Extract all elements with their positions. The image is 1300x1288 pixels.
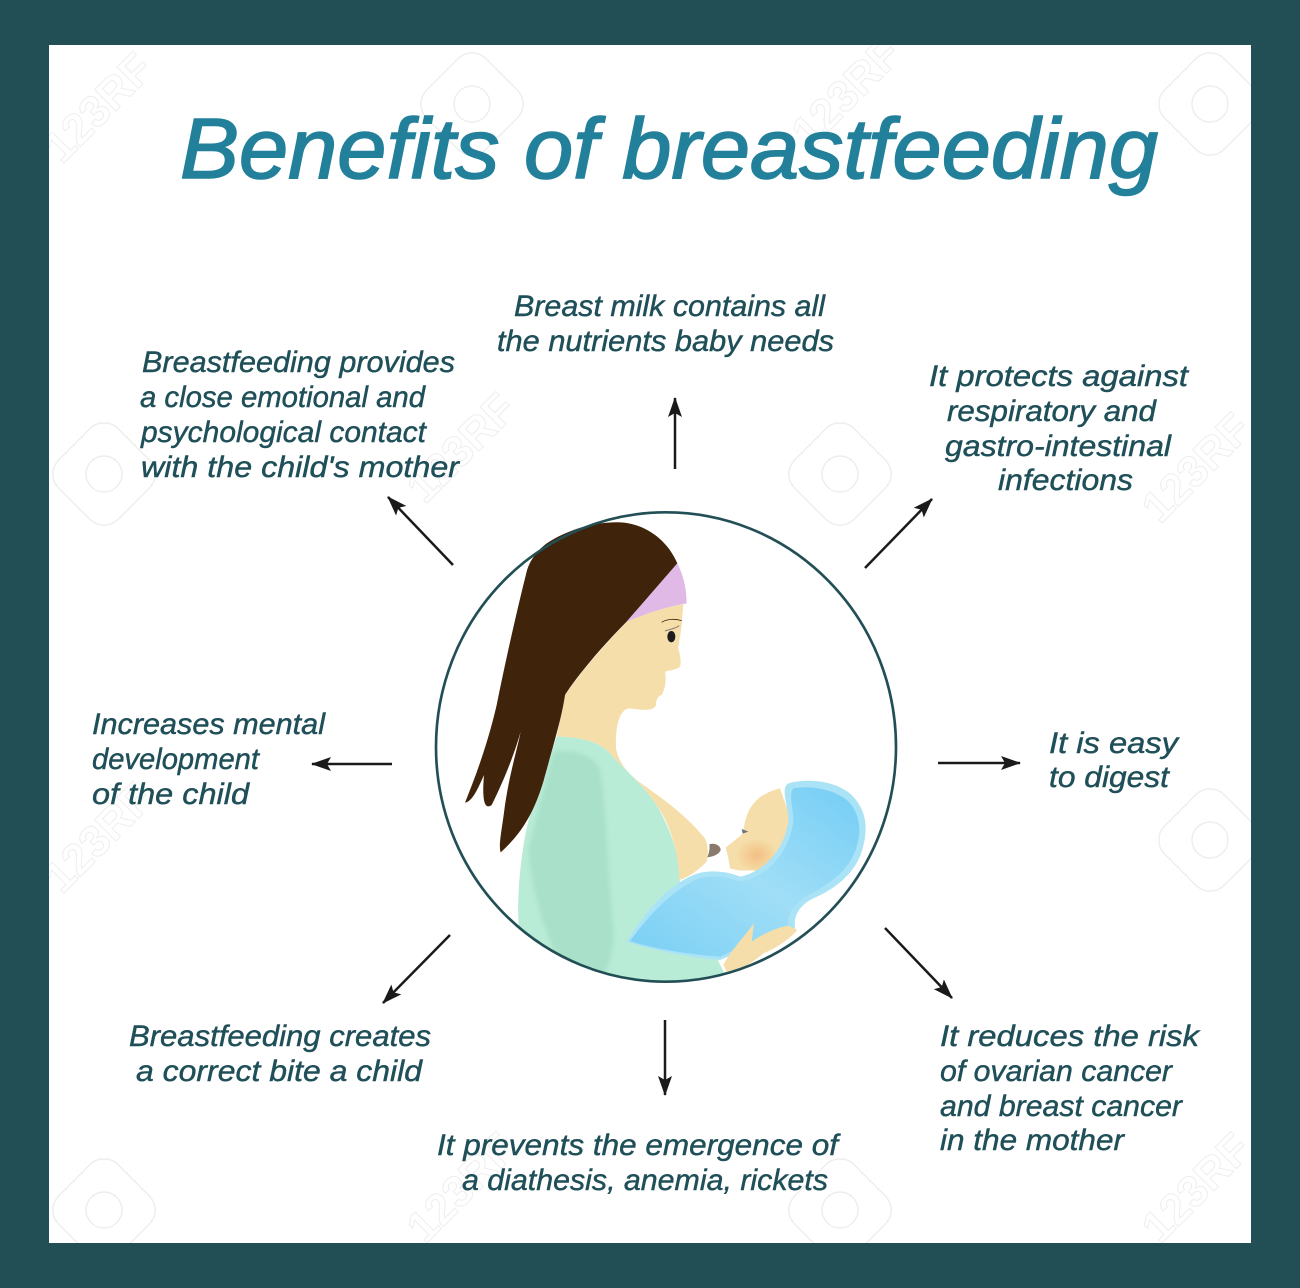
text: easy to digest bbox=[1049, 727, 1180, 794]
text: mental development bbox=[92, 708, 326, 811]
text: nutrients: Breast milk contains all bbox=[514, 290, 826, 323]
text: mental development: development bbox=[92, 743, 261, 776]
text: emotional contact: Breastfeeding provides bbox=[142, 346, 455, 379]
text: nutrients: the nutrients baby needs bbox=[497, 325, 834, 358]
mother's dress bbox=[518, 737, 730, 985]
mother's face, neck and chest bbox=[557, 604, 708, 880]
text: emotional contact: with the child's mother bbox=[141, 451, 460, 484]
arrow: up left bbox=[388, 497, 453, 565]
text: infections: It protects against bbox=[929, 360, 1190, 393]
watermarks: 123RF bbox=[1132, 1124, 1260, 1252]
text: emotional contact bbox=[140, 346, 460, 484]
illustration: mother and baby in circle bbox=[436, 512, 896, 985]
watermarks: 123RF bbox=[782, 29, 910, 157]
watermarks: 123RF bbox=[397, 1124, 525, 1252]
watermarks: 123RF bbox=[34, 774, 162, 902]
watermarks: 123RF bbox=[1132, 404, 1260, 532]
text: mental development: Increases mental bbox=[92, 708, 326, 741]
arrow: down left bbox=[383, 935, 450, 1003]
eye and eyebrow bbox=[662, 619, 682, 642]
baby eye bbox=[742, 829, 748, 834]
circle outline bbox=[436, 512, 896, 982]
arrow: up bbox=[674, 398, 676, 469]
text: emotional contact: a close emotional and bbox=[140, 381, 426, 414]
text: mental development: of the child bbox=[92, 778, 250, 811]
mother's hair bbox=[465, 522, 677, 852]
arrow: up right bbox=[865, 499, 932, 568]
nipple bbox=[707, 844, 721, 857]
text: cancer risk: in the mother bbox=[940, 1124, 1125, 1157]
arrow: left bbox=[312, 763, 392, 765]
watermarks: 123RF bbox=[34, 44, 162, 172]
arrow: down right bbox=[885, 928, 952, 998]
text: easy to digest: It is easy bbox=[1049, 727, 1180, 760]
title: Benefits of breastfeeding bbox=[180, 102, 1158, 197]
headband bbox=[627, 563, 687, 622]
text: infections bbox=[929, 360, 1190, 497]
text: cancer risk bbox=[940, 1020, 1201, 1157]
mother's hand bbox=[723, 923, 797, 972]
text: diathesis, anemia, rickets: a diathesis, anemia, rickets bbox=[462, 1164, 828, 1197]
text: infections: infections bbox=[998, 464, 1133, 497]
text: infections: gastro-intestinal bbox=[945, 430, 1172, 463]
blanket bbox=[627, 781, 866, 960]
text: diathesis, anemia, rickets: It prevents the emergence of bbox=[437, 1129, 841, 1162]
text: easy to digest: to digest bbox=[1049, 761, 1171, 794]
baby cheek bbox=[737, 839, 776, 871]
text: diathesis, anemia, rickets bbox=[437, 1129, 841, 1197]
baby head bbox=[726, 788, 792, 871]
text: cancer risk: It reduces the risk bbox=[940, 1020, 1201, 1053]
text: correct bite bbox=[129, 1020, 431, 1088]
text: correct bite: Breastfeeding creates bbox=[129, 1020, 431, 1053]
text: nutrients bbox=[497, 290, 834, 358]
watermarks: 123RF bbox=[397, 384, 525, 512]
text: correct bite: a correct bite a child bbox=[136, 1055, 423, 1088]
arrow: right bbox=[938, 762, 1020, 764]
text: cancer risk: of ovarian cancer bbox=[940, 1055, 1173, 1088]
text: cancer risk: and breast cancer bbox=[940, 1090, 1183, 1123]
text: emotional contact: psychological contact bbox=[140, 416, 428, 449]
text: infections: respiratory and bbox=[947, 395, 1157, 428]
arrow: down bbox=[664, 1020, 666, 1095]
